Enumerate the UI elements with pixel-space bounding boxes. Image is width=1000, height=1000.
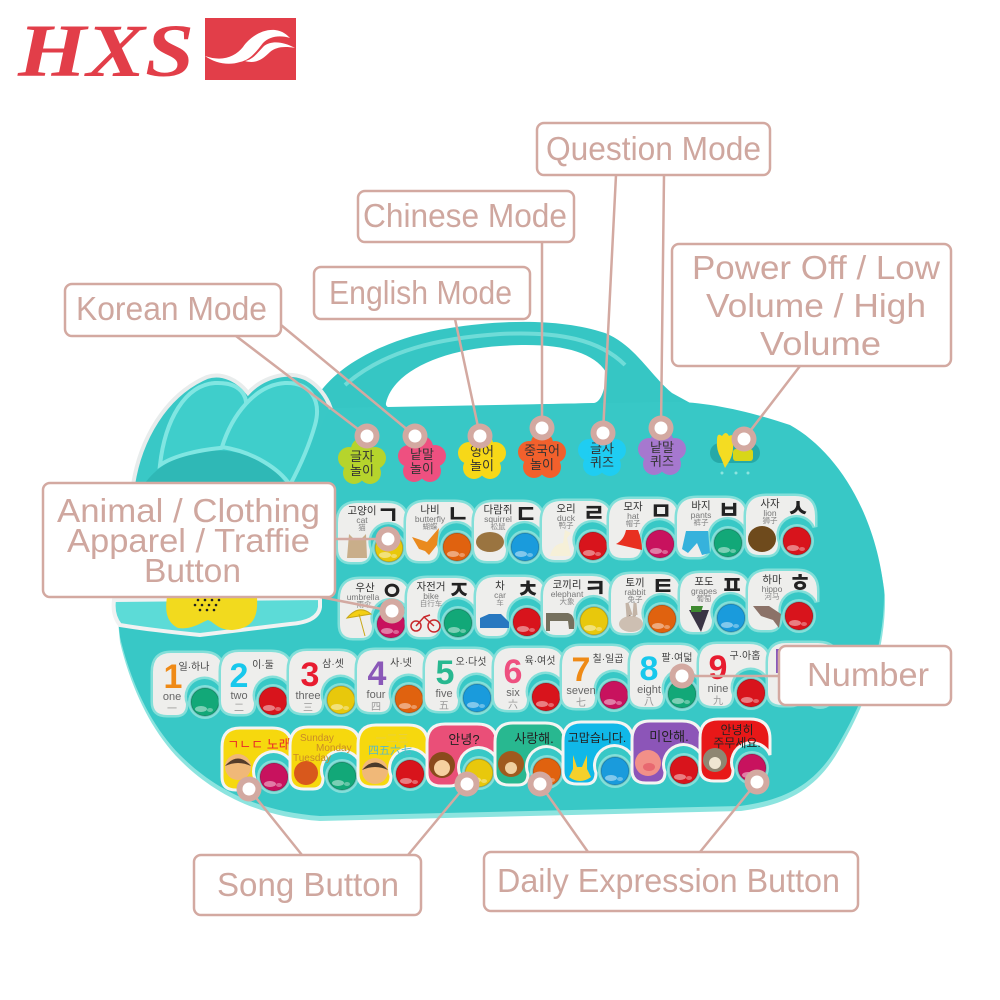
tile: bieup: ㅂ [717,497,741,525]
tile: siot: ㅅ [786,495,810,523]
tile: hieut [748,570,817,633]
flower: letter quiz [578,430,626,476]
logo wordmark: HXS [17,10,194,93]
tile: nieun: 蝴蝶 [422,521,438,531]
tile: siot [746,495,815,558]
tile: bieup: pants [691,510,711,520]
label: English Mode: English Mode [329,274,512,311]
tile: 6 [494,648,564,714]
tile: pieup: grapes [691,586,717,596]
tile: kieuk: 코끼리 [553,579,581,591]
tile: mieum: 帽子 [626,518,641,528]
main body [115,402,884,816]
flower: Chinese: 중국어 [524,443,560,458]
label: Animal / Clothing Apparel / Traffie Button: Apparel / Traffie [67,522,310,559]
tile: 7 [562,646,632,712]
tile: chieut: ㅊ [516,576,540,604]
label: Power Off / Low Volume / High Volume: Volume [760,325,881,362]
flower: Korean letters: 글자 [350,449,374,464]
logo [17,10,296,93]
tile: kieuk: ㅋ [583,575,607,603]
tile: 5: 五 [439,701,449,712]
logo emblem [205,18,296,80]
tile: rieul: duck [557,513,576,523]
tile: days song: Sunday [300,733,334,744]
tile: 4: 4 [368,655,387,693]
label: Power Off / Low Volume / High Volume: Volume / High [706,287,926,324]
flower: letter quiz: 글자 [590,441,614,456]
tile: kieuk [543,575,612,638]
label: Daily Expression Button: Daily Expression Button [497,862,840,899]
row 4 song and expression tiles [222,719,770,794]
flower: word quiz [638,429,686,475]
tile: 2: 2 [230,657,248,695]
label: Question Mode [537,123,770,175]
tile: 9: 9 [709,649,727,687]
tile: jieut: 自行车 [420,598,443,608]
tile: thank you: 고맙습니다. [568,731,626,745]
flower: English: 영어 [470,444,494,459]
tile: tieut: rabbit [624,587,646,597]
flower: Korean words: 놀이 [410,461,434,476]
label: Number: Number [807,656,929,693]
label: English Mode [314,267,530,319]
handle [320,322,703,420]
right ear [222,383,317,485]
carrot power switch [710,433,760,474]
tile: 2 [221,652,291,718]
tile: bieup: 바지 [691,500,711,512]
tile: jieut [407,577,476,640]
tile: alphabet song: ㄱㄴㄷ 노래 [227,737,291,752]
tile: 3: 3 [301,656,319,694]
tile: 8: eight [637,684,661,696]
tile: ieung: 우산 [355,582,375,594]
tile: siot: 사자 [760,498,780,510]
speaker ruffle [114,598,320,635]
tile: 1: 一 [167,704,177,715]
tile: sorry [632,721,702,787]
tile: rieul: 오리 [556,503,576,515]
tile: digeut: 다람쥐 [484,503,512,516]
bottom lip [115,408,885,821]
tile: siot: lion [763,508,777,518]
tile: 5: five [435,688,453,700]
tile: digeut: ㄷ [514,501,538,529]
label: Power Off / Low Volume / High Volume [672,244,951,366]
flower: English: 놀이 [470,458,494,473]
tile: nieun: ㄴ [446,501,470,529]
tile: 5: 5 [436,654,454,692]
tile: 6: 六 [508,698,518,711]
tile: 6: 6 [504,653,522,691]
tile: numbers song: 四五六七 [368,744,412,757]
tile: thank you [563,722,633,788]
tile: ieung: umbrella [347,592,380,602]
tile: 9: 九 [713,695,723,707]
tile: nieun: butterfly [415,514,446,524]
tile: 2: two [230,690,248,702]
tile: sorry: 미안해. [649,729,689,744]
tile: rieul: 鸭子 [558,520,574,530]
tile: ieung [340,578,409,641]
left ear [160,383,246,465]
tile: nieun: 나비 [420,504,440,516]
tile: tieut: 토끼 [625,577,645,589]
tile: 7: 7 [572,651,590,689]
tile: chieut [476,576,545,639]
tile: tieut [611,573,680,636]
tile: rieul [542,500,611,563]
tile: 8: 八 [644,697,654,708]
tile: good night [700,719,770,785]
tile: days song: Monday [316,743,352,754]
tile: hello [427,724,497,790]
callout: markers [236,416,770,802]
tile: 3: 삼·셋 [322,658,344,670]
tile: jieut: bike [423,591,439,601]
tile: 6: six [506,687,520,699]
speaker flower [166,597,257,630]
flower: Chinese [518,432,566,478]
flower: Korean letters: 놀이 [350,463,374,478]
tile: 6: 육·여섯 [525,655,555,667]
flower: English [458,433,506,479]
tile: giyeok: 고양이 [348,505,376,517]
label: Korean Mode: Korean Mode [76,290,267,327]
label: Song Button: Song Button [217,866,399,903]
tile: chieut: 차 [495,580,505,592]
callout: leader lines [236,175,800,855]
flower: Korean words [398,436,446,482]
tile: good night: 주무세요. [713,736,761,750]
tile: kieuk: elephant [551,589,584,599]
tile: giyeok: cat [356,515,368,525]
flower: letter quiz: 퀴즈 [590,455,614,470]
tile: 4 [357,650,427,716]
tile: good night: 안녕히 [720,723,754,737]
tile: 4: 사·넷 [390,657,412,669]
tile: 7: 칠·일곱 [593,653,623,665]
tile: alphabet song [222,728,292,794]
tile: 2: 二 [234,703,244,714]
row 1 tiles [338,495,815,565]
label: Animal / Clothing Apparel / Traffie Button: Animal / Clothing [57,492,320,529]
flower: Korean words: 낱말 [410,447,434,462]
tile: jieut: 자전거 [417,581,445,593]
tile: 3: three [295,690,321,702]
tile: 9: nine [708,683,728,695]
tile: mieum: 모자 [623,501,643,513]
tile: 1 [153,653,223,719]
label: Song Button [194,855,421,915]
tile: 7: seven [566,685,596,697]
rabbit face [143,451,288,490]
tile: 9 [699,644,769,710]
tile: giyeok: 猫 [358,522,366,532]
tile: giyeok: ㄱ [376,502,400,530]
label: Daily Expression Button [484,852,858,911]
tile: bieup: 裤子 [694,517,709,527]
tile: hello: 안녕? [448,732,480,747]
tile: days song: Tuesday [293,753,331,764]
tile: 1: 1 [164,658,182,696]
tile: chieut: 车 [496,597,504,607]
tile: numbers song [358,725,428,791]
tile: 7: 七 [576,697,586,709]
row 3 number tiles [153,643,838,719]
tile: I love you: 사랑해. [514,731,554,746]
label: Korean Mode [65,284,281,336]
flower: word quiz: 낱말 [650,440,674,455]
tile: mieum [609,498,678,561]
tile: 1: one [163,691,181,703]
tile: digeut [474,501,543,564]
tile: pieup: 포도 [694,576,714,588]
tile: hieut: ㅎ [788,570,812,598]
tile: 2: 이·둘 [252,659,274,671]
tile: I love you [495,723,565,789]
handle highlight [345,333,625,385]
tile: hieut: 하마 [762,573,782,586]
label: Animal / Clothing Apparel / Traffie Button: Button [144,552,241,589]
tile: 3 [289,651,359,717]
label: Animal / Clothing Apparel / Traffie Button [43,483,335,597]
toy board [114,322,885,821]
tile: pieup: 葡萄 [696,593,712,603]
tile: bieup [677,497,746,560]
label: Question Mode: Question Mode [546,130,761,167]
tile: 5 [425,649,495,715]
tile: 4: four [367,689,386,701]
tile: jieut: ㅈ [447,577,471,605]
tile: mieum: ㅁ [649,498,673,526]
tile: 3: 三 [303,703,313,714]
tile: 8: 8 [640,650,658,688]
tile: kieuk: 大象 [560,596,575,606]
tile: nieun [406,501,475,564]
tile: numbers song: 一二三 [376,733,408,745]
tile: chieut: car [494,590,506,600]
tile: 10 [768,643,838,709]
tile: 1: 일·하나 [179,660,209,673]
tile: siot: 狮子 [762,516,778,525]
mode buttons [338,429,760,484]
tile: 5: 오·다섯 [456,656,486,668]
tile: 8: 팔·여덟 [662,652,692,664]
tile: 9: 구·아홉 [730,649,760,662]
tile: ieung: 雨伞 [356,599,372,609]
tile: ieung: ㅇ [380,578,404,606]
label: Chinese Mode: Chinese Mode [363,197,567,234]
tile: days song [290,727,360,793]
tile: rieul: ㄹ [582,500,606,528]
flower: Chinese: 놀이 [530,457,554,472]
tile: hieut: 河马 [764,592,780,601]
flower: Korean letters [338,438,386,484]
tile: 8 [630,645,700,711]
rabbit ears backing [133,375,333,490]
tile: tieut: ㅌ [651,573,675,601]
label: Power Off / Low Volume / High Volume: Power Off / Low [692,249,940,286]
tile: 4: 四 [371,702,381,713]
tile: digeut: squirrel [484,514,512,524]
tile: digeut: 松鼠 [490,521,506,531]
tile: pieup [680,572,749,635]
tile: hieut: hippo [762,584,783,594]
tile: giyeok [338,502,407,565]
tile: mieum: hat [627,511,640,521]
label: Number [779,646,951,705]
tile: pieup: ㅍ [720,572,744,600]
flower: word quiz: 퀴즈 [650,454,674,469]
tile: tieut: 兔子 [628,594,643,604]
row 2 tiles [340,570,817,641]
